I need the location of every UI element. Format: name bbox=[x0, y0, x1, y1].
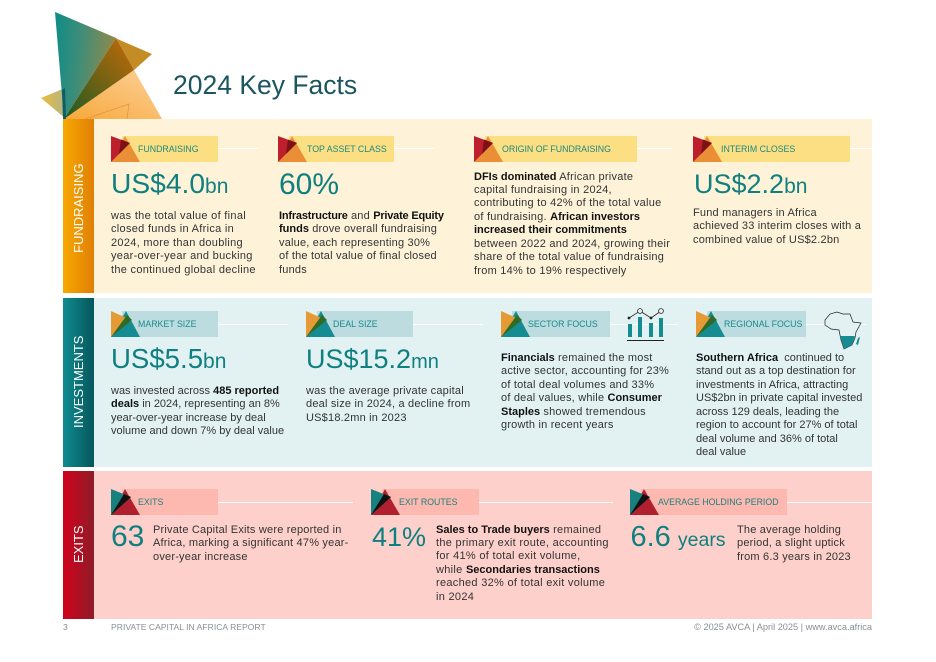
text: sector focus: of deal values, while Consumer bbox=[501, 392, 662, 404]
stat: US$2.2bn: US$2.2bn bbox=[694, 169, 807, 199]
tag: exit routes bbox=[382, 489, 479, 515]
text: exit routes: for 41% of total exit volume, bbox=[436, 550, 580, 562]
stat: 41%: 41% bbox=[372, 522, 426, 552]
text: regional focus: US$2bn in private capital invested bbox=[696, 392, 862, 404]
text: regional focus: deal volume and 36% of total bbox=[696, 433, 838, 445]
icon: market size triangles bbox=[111, 311, 140, 337]
text: fundraising bbox=[111, 210, 256, 276]
side label: investments: INVESTMENTS bbox=[71, 335, 86, 428]
text: top asset class bbox=[279, 210, 444, 276]
stat: 63: 63 bbox=[111, 520, 144, 553]
footer: page number: 3 bbox=[63, 622, 68, 632]
side bar: fundraising bbox=[63, 119, 94, 293]
text: top asset class: funds drove overall fundraising bbox=[279, 223, 437, 235]
text: interim closes: Fund managers in Africa bbox=[693, 207, 817, 219]
stat: 6.6 years: 6.6 years bbox=[630, 521, 726, 553]
side bar: investments bbox=[63, 298, 94, 467]
text: market size: volume and down 7% by deal value bbox=[111, 425, 284, 437]
side bar: exits bbox=[63, 471, 94, 619]
stat: US$4.0bn: US$4.0bn bbox=[111, 167, 228, 199]
text: exits bbox=[153, 524, 348, 563]
footer: report name: PRIVATE CAPITAL IN AFRICA REPORT bbox=[111, 622, 266, 632]
tag: regional focus: REGIONAL FOCUS bbox=[724, 319, 802, 329]
text: top asset class: value, each representing 30% bbox=[279, 237, 430, 249]
tag: exit routes: EXIT ROUTES bbox=[399, 497, 458, 507]
text: sector focus: growth in recent years bbox=[501, 419, 614, 431]
tag: exits: EXITS bbox=[138, 497, 163, 507]
text: regional focus: across 129 deals, leading the bbox=[696, 406, 839, 418]
text: holding period: period, a slight uptick bbox=[737, 537, 845, 549]
text: sector focus: of total deal volumes and 33% bbox=[501, 379, 654, 391]
text: origin of fundraising: share of the total value of fundraising bbox=[474, 251, 664, 263]
text: regional focus: investments in Africa, attracting bbox=[696, 379, 848, 391]
text: exits: Private Capital Exits were reported in bbox=[153, 524, 342, 536]
text: market size: was invested across 485 reported bbox=[111, 385, 279, 397]
tag: origin of fundraising: ORIGIN OF FUNDRAISING bbox=[502, 144, 611, 154]
icon: exits triangles bbox=[111, 489, 140, 515]
text: exit routes: in 2024 bbox=[436, 591, 474, 603]
panel: investments bbox=[94, 298, 872, 467]
tag: fundraising bbox=[122, 136, 218, 162]
text: interim closes: combined value of US$2.2bn bbox=[693, 234, 839, 246]
text: interim closes bbox=[693, 207, 861, 246]
text: market size: deals in 2024, representing an 8% bbox=[111, 398, 280, 410]
tag: average holding period bbox=[641, 489, 787, 515]
text: origin of fundraising: contributing to 42% of the total value bbox=[474, 197, 661, 209]
text: sector focus bbox=[501, 352, 669, 431]
text: regional focus: stand out as a top destination for bbox=[696, 365, 856, 377]
text: fundraising: closed funds in Africa in bbox=[111, 223, 234, 235]
text: deal size bbox=[306, 385, 470, 424]
tag: sector focus: SECTOR FOCUS bbox=[528, 319, 598, 329]
text: sector focus: active sector, accounting for 23% bbox=[501, 365, 669, 377]
text: deal size: deal size in 2024, a decline from bbox=[306, 398, 470, 410]
icon: exit routes triangles bbox=[371, 489, 400, 515]
tag: top asset class: TOP ASSET CLASS bbox=[307, 144, 387, 154]
text: market size bbox=[111, 385, 284, 437]
exits items bbox=[111, 489, 872, 603]
logo triangles decoration bbox=[41, 12, 162, 119]
stat: 60%: 60% bbox=[279, 168, 339, 201]
investments items bbox=[111, 308, 866, 458]
text: holding period bbox=[737, 524, 851, 563]
tag: sector focus bbox=[512, 311, 610, 337]
text: exit routes: Sales to Trade buyers remained bbox=[436, 524, 601, 536]
icon: regional focus triangles bbox=[696, 311, 725, 337]
text: origin of fundraising bbox=[474, 170, 670, 277]
text: fundraising: 2024, more than doubling bbox=[111, 237, 243, 249]
text: regional focus: region to account for 27% of total bbox=[696, 419, 857, 431]
panel: exits bbox=[94, 471, 872, 619]
text: regional focus: Southern Africa continued to bbox=[696, 352, 844, 364]
icon: interim closes triangles bbox=[693, 136, 722, 162]
text: top asset class: of the total value of final closed bbox=[279, 250, 437, 262]
icon: holding period triangles bbox=[630, 489, 659, 515]
text: exits: over-year increase bbox=[153, 551, 248, 563]
tag: exits bbox=[122, 489, 218, 515]
stat: US$5.5bn: US$5.5bn bbox=[111, 343, 226, 374]
panel: fundraising bbox=[94, 119, 872, 293]
icon: deal size triangles bbox=[306, 311, 335, 337]
side label: fundraising: FUNDRAISING bbox=[71, 163, 86, 253]
side label: exits: EXITS bbox=[71, 525, 86, 563]
tag: fundraising: FUNDRAISING bbox=[138, 144, 199, 154]
text: fundraising: the continued global decline bbox=[111, 264, 256, 276]
text: fundraising: was the total value of final bbox=[111, 210, 246, 222]
text: top asset class: Infrastructure and Private Equity bbox=[279, 210, 444, 222]
text: origin of fundraising: of fundraising. African investors bbox=[474, 211, 640, 223]
text: top asset class: funds bbox=[279, 264, 307, 276]
text: exits: Africa, marking a significant 47% year- bbox=[153, 537, 348, 549]
text: origin of fundraising: increased their commitments bbox=[474, 224, 627, 236]
tag: average holding period: AVERAGE HOLDING PERIOD bbox=[658, 497, 779, 507]
tag: regional focus bbox=[707, 311, 806, 337]
text: interim closes: achieved 33 interim closes with a bbox=[693, 220, 861, 232]
tag: origin of fundraising bbox=[485, 136, 637, 162]
text: exit routes bbox=[436, 524, 609, 603]
text: exit routes: while Secondaries transactions bbox=[436, 564, 600, 576]
icon: bar chart with trend line bbox=[627, 308, 664, 341]
icon: sector focus triangles bbox=[501, 311, 530, 337]
text: market size: year-over-year increase by deal bbox=[111, 412, 266, 424]
text: deal size: US$18.2mn in 2023 bbox=[306, 412, 407, 424]
text: holding period: The average holding bbox=[737, 524, 841, 536]
icon: Africa map bbox=[824, 312, 862, 350]
fundraising items bbox=[111, 136, 872, 277]
text: deal size: was the average private capital bbox=[306, 385, 464, 397]
tag: interim closes bbox=[704, 136, 850, 162]
text: origin of fundraising: from 14% to 19% respectively bbox=[474, 265, 627, 277]
text: holding period: from 6.3 years in 2023 bbox=[737, 551, 851, 563]
tag: deal size bbox=[317, 311, 413, 337]
tag: top asset class bbox=[289, 136, 394, 162]
text: sector focus: Staples showed tremendous bbox=[501, 406, 646, 418]
tag: market size bbox=[122, 311, 218, 337]
icon: fundraising triangles bbox=[111, 136, 140, 162]
text: sector focus: Financials remained the most bbox=[501, 352, 653, 364]
icon: top asset class triangles bbox=[278, 136, 307, 162]
text: fundraising: year-over-year and bucking bbox=[111, 250, 253, 262]
stat: US$15.2mn: US$15.2mn bbox=[306, 344, 439, 374]
tag: interim closes: INTERIM CLOSES bbox=[721, 144, 795, 154]
tag: deal size: DEAL SIZE bbox=[333, 319, 378, 329]
text: regional focus: deal value bbox=[696, 446, 746, 458]
text: origin of fundraising: DFIs dominated African private bbox=[474, 170, 633, 182]
text: origin of fundraising: between 2022 and 2024, growing their bbox=[474, 238, 670, 250]
title: 2024 Key Facts bbox=[173, 70, 357, 100]
text: exit routes: the primary exit route, accounting bbox=[436, 537, 609, 549]
footer: copyright: © 2025 AVCA | April 2025 | www.avca.africa bbox=[694, 622, 872, 632]
tag: market size: MARKET SIZE bbox=[138, 319, 196, 329]
text: exit routes: reached 32% of total exit volume bbox=[436, 577, 605, 589]
text: origin of fundraising: capital fundraising in 2024, bbox=[474, 184, 612, 196]
icon: origin triangles bbox=[474, 136, 503, 162]
text: regional focus bbox=[696, 352, 862, 458]
